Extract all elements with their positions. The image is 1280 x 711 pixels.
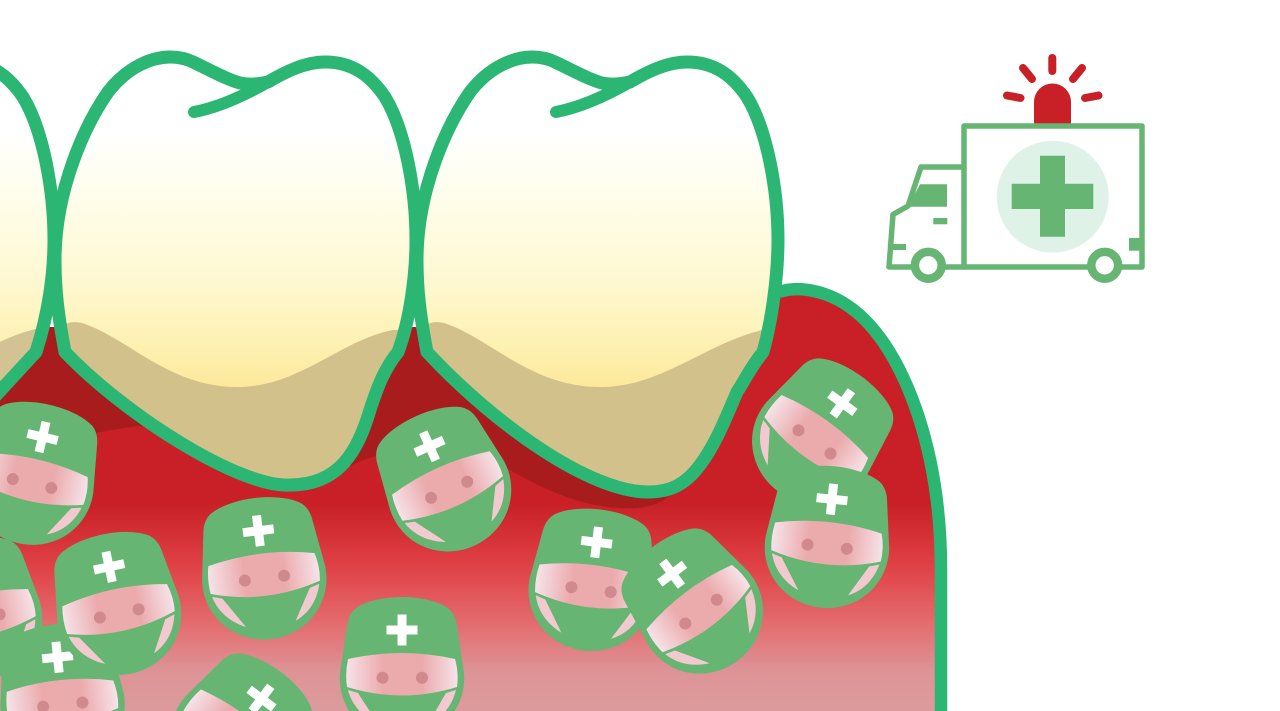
tooth right fissure — [556, 82, 630, 112]
medic face 10 — [0, 618, 131, 711]
tooth centre outline — [55, 57, 416, 485]
medical circle — [997, 141, 1109, 253]
icon: ambulance — [889, 58, 1142, 279]
rear wheel — [1091, 252, 1118, 279]
dark gum shadow left — [0, 327, 150, 441]
tooth left outline — [0, 62, 54, 404]
medic face 4 — [728, 340, 912, 528]
medic face 7 — [603, 510, 787, 698]
siren light — [1034, 84, 1071, 124]
tooth left fill — [0, 62, 54, 430]
medic face 3 — [359, 391, 531, 571]
bumper — [892, 244, 906, 250]
medic face 12 — [146, 635, 331, 711]
medical cross — [1012, 156, 1093, 237]
cab outline — [889, 167, 964, 267]
tooth right fill — [417, 57, 778, 492]
tooth right outline — [417, 57, 778, 492]
ambulance body — [964, 126, 1142, 267]
medic face 8 — [41, 522, 193, 686]
plaque left tooth — [0, 329, 36, 381]
medic face 11 — [0, 527, 54, 691]
medic face 2 — [193, 490, 333, 647]
medic face 9 — [340, 597, 464, 711]
plaque centre tooth — [66, 322, 398, 479]
front wheel — [915, 252, 942, 279]
cab window — [908, 184, 947, 207]
gum — [0, 289, 941, 711]
plaque right tooth — [428, 322, 762, 486]
medic face 1 — [0, 391, 111, 557]
dark gum shadow right — [330, 327, 770, 508]
siren rays — [1007, 58, 1098, 98]
gum outline — [779, 289, 941, 711]
door handle — [933, 218, 947, 224]
medic face 5 — [759, 460, 897, 614]
rear light — [1129, 238, 1140, 251]
tooth centre fill — [55, 57, 416, 485]
tooth centre fissure — [194, 82, 268, 112]
medic face 6 — [522, 502, 662, 658]
